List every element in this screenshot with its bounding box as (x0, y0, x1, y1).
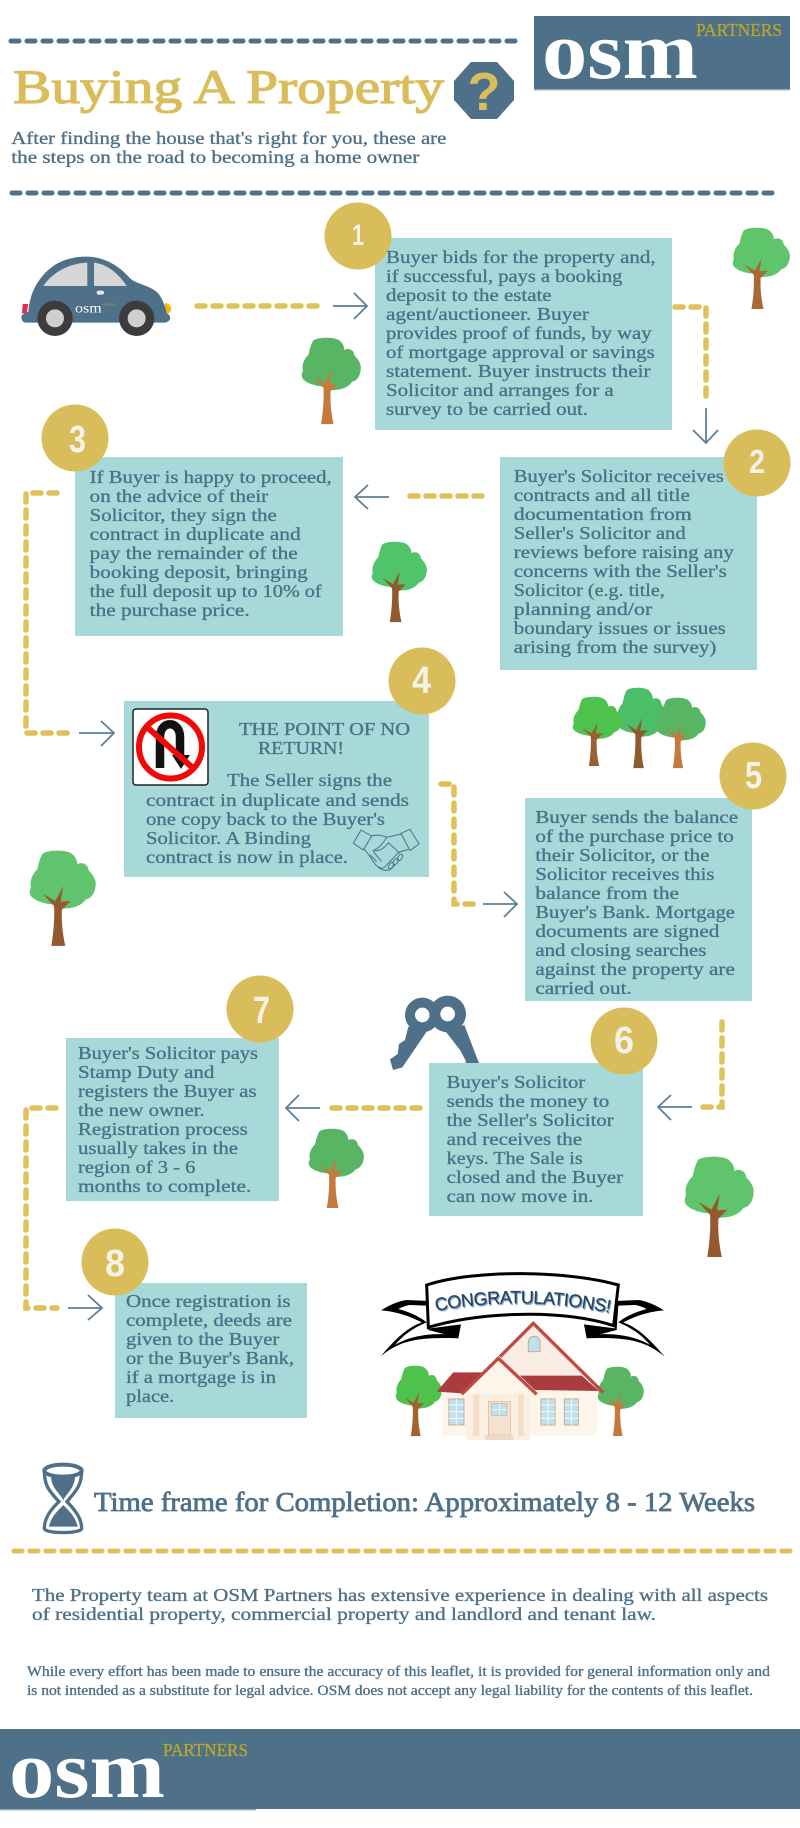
step number 6 (590, 1008, 658, 1074)
step number 4 (388, 648, 456, 714)
icon: car: osm (75, 302, 102, 317)
panel: step 1: if successful, pays a booking (386, 266, 622, 286)
panel: step 7: Registration process (78, 1119, 248, 1139)
disclaimer (27, 1664, 771, 1699)
panel: step 1: provides proof of funds, by way (386, 323, 652, 343)
panel: step 5: Buyer sends the balance (535, 807, 738, 827)
panel: step 3 (42, 404, 343, 636)
arrow: car to step 1 (197, 293, 367, 319)
arrow: step 3 to step 4 (26, 493, 114, 746)
panel: step 8: complete, deeds are (126, 1310, 292, 1330)
panel: step 2: Seller's Solicitor and (514, 523, 686, 543)
step 4 text: The Seller signs the (227, 770, 392, 790)
panel: step 8: given to the Buyer (126, 1329, 279, 1349)
panel: step 2: arising from the survey) (514, 637, 716, 658)
arrow: step 5 to step 6 (658, 1022, 722, 1120)
arrow: step 2 to step 3 (355, 485, 482, 509)
about paragraph: of residential property, commercial property and landlord and tenant law. (32, 1604, 656, 1624)
logo top: PARTNERS (696, 20, 782, 40)
panel: step 5: documents are signed (535, 921, 719, 941)
arrow: step 1 to step 2 (675, 307, 718, 443)
step number 7: 7 (253, 990, 270, 1032)
panel: step 7: months to complete. (78, 1176, 251, 1196)
panel: step 8: Once registration is (126, 1291, 291, 1311)
panel: step 2: concerns with the Seller's (514, 561, 727, 581)
panel: step 1: agent/auctioneer. Buyer (386, 304, 589, 324)
panel: step 8: place. (126, 1386, 174, 1406)
footer band: PARTNERS (163, 1740, 248, 1760)
panel: step 5: and closing searches (535, 940, 706, 960)
panel: step 7: region of 3 - 6 (78, 1157, 195, 1177)
panel: step 1: deposit to the estate (386, 285, 552, 305)
step number 6: 6 (614, 1020, 634, 1062)
panel: step 1 (324, 202, 672, 430)
panel: step 3: If Buyer is happy to proceed, (90, 467, 332, 487)
illustration: congratulations banner (380, 1272, 664, 1396)
icon: question mark octagon (454, 62, 514, 122)
step 4 text (146, 770, 409, 867)
panel: step 6: the Seller's Solicitor (447, 1110, 614, 1130)
step 4 text: contract in duplicate and sends (146, 790, 409, 810)
tree (309, 1129, 364, 1208)
footer band: osm (9, 1724, 165, 1815)
panel: step 5: of the purchase price to (535, 826, 734, 846)
panel: step 3: Solicitor, they sign the (90, 505, 277, 525)
step number 8 (82, 1228, 148, 1296)
icon: handshake (353, 829, 419, 870)
panel: step 7: Buyer's Solicitor pays (78, 1043, 258, 1063)
arrow: step 6 to step 7 (286, 1095, 420, 1121)
step number 2: 2 (749, 443, 765, 480)
panel: step 2: Solicitor (e.g. title, (514, 580, 665, 601)
step number 1 (324, 202, 392, 270)
panel: step 5: against the property are (535, 959, 735, 979)
illustration: congratulations banner: CONGRATULATIONS! (436, 1290, 611, 1312)
step number 2 (724, 430, 790, 496)
panel: step 1: Solicitor and arranges for a (386, 380, 614, 400)
panel: step 8: or the Buyer's Bank, (126, 1348, 294, 1368)
panel: step 3: booking deposit, bringing (90, 562, 308, 582)
panel: step 3: the full deposit up to 10% of (90, 581, 322, 601)
tree (685, 1157, 754, 1257)
panel: step 5 (525, 742, 786, 1001)
panel: step 5: carried out. (535, 978, 632, 998)
heading: the point of no return: THE POINT OF NO (239, 719, 410, 739)
panel: step 3: pay the remainder of the (90, 543, 298, 563)
title: Buying A Property (13, 61, 444, 114)
panel: step 1: Buyer bids for the property and, (386, 247, 656, 267)
panel: step 6: sends the money to (447, 1091, 609, 1111)
time frame heading: Time frame for Completion: Approximately 8 - 12 Weeks (94, 1487, 755, 1517)
panel: step 3: the purchase price. (90, 600, 250, 620)
tree (302, 338, 361, 424)
trees group (573, 688, 706, 768)
panel: step 7: registers the Buyer as (78, 1081, 256, 1101)
panel: step 5: their Solicitor, or the (535, 845, 709, 865)
step number 4: 4 (412, 660, 431, 702)
tree (30, 851, 96, 946)
step 4 text: one copy back to the Buyer's (146, 809, 385, 829)
panel: step 2: boundary issues or issues (514, 618, 726, 638)
panel: step 1: of mortgage approval or savings (386, 342, 655, 362)
subtitle: the steps on the road to becoming a home owner (11, 147, 419, 167)
step number 7 (226, 976, 294, 1042)
icon: car (21, 257, 171, 336)
tree (396, 1366, 442, 1436)
disclaimer: While every effort has been made to ensure the accuracy of this leaflet, it is provided for general information only and (27, 1664, 771, 1680)
heading: the point of no return: RETURN! (258, 738, 344, 758)
tree (733, 228, 790, 309)
step number 5: 5 (745, 755, 762, 797)
step number 8: 8 (105, 1243, 125, 1285)
panel: step 7: Stamp Duty and (78, 1062, 214, 1082)
panel: step 1: statement. Buyer instructs their (386, 361, 651, 381)
subtitle (11, 128, 446, 167)
icon: car: PARTNERS (102, 302, 116, 306)
arrow: step 7 to step 8 (26, 1108, 102, 1320)
tree (372, 542, 427, 622)
step number 5 (720, 742, 786, 810)
about paragraph (32, 1585, 768, 1624)
panel: step 7: the new owner. (78, 1100, 205, 1120)
illustration: congratulations banner: CONGRATULATIONS! (437, 1292, 612, 1314)
panel: step 5: balance from the (535, 883, 679, 903)
panel: step 1: survey to be carried out. (386, 399, 588, 419)
panel: step 6: closed and the Buyer (447, 1167, 623, 1187)
panel: step 6: can now move in. (447, 1186, 593, 1206)
panel: step 7 (66, 976, 294, 1201)
panel: step 7: usually takes in the (78, 1138, 238, 1158)
icon: no u-turn sign (133, 709, 208, 785)
panel: step 8: if a mortgage is in (126, 1367, 276, 1387)
panel: step 4 (124, 648, 456, 877)
icon: question mark octagon: ? (468, 62, 500, 122)
step number 1: 1 (352, 219, 364, 252)
step 4 text: Solicitor. A Binding (146, 828, 311, 848)
step number 3: 3 (69, 419, 86, 461)
logo top (534, 5, 790, 96)
panel: step 2 (500, 430, 790, 670)
panel: step 6: Buyer's Solicitor (447, 1072, 585, 1092)
panel: step 6: keys. The Sale is (447, 1148, 583, 1168)
panel: step 6: and receives the (447, 1129, 582, 1149)
panel: step 2: reviews before raising any (514, 542, 734, 562)
panel: step 6 (429, 1008, 658, 1216)
footer band (0, 1724, 800, 1815)
step number 3 (42, 404, 108, 472)
logo top: osm (542, 5, 698, 96)
step 4 text: contract is now in place. (146, 847, 348, 867)
heading: the point of no return (239, 719, 410, 758)
panel: step 2: contracts and all title (514, 485, 690, 505)
illustration: house (437, 1323, 603, 1440)
panel: step 3: contract in duplicate and (90, 524, 301, 544)
panel: step 8 (82, 1228, 307, 1418)
panel: step 3: on the advice of their (90, 486, 268, 506)
arrow: step 4 to step 5 (441, 784, 517, 917)
icon: keys (390, 996, 481, 1073)
subtitle: After finding the house that's right for you, these are (11, 128, 446, 148)
about paragraph: The Property team at OSM Partners has extensive experience in dealing with all aspects (32, 1585, 768, 1605)
panel: step 5: Buyer's Bank. Mortgage (535, 902, 735, 922)
panel: step 5: Solicitor receives this (535, 864, 714, 884)
panel: step 2: planning and/or (514, 599, 652, 619)
icon: hourglass (44, 1465, 82, 1533)
disclaimer: is not intended as a substitute for legal advice. OSM does not accept any legal liability for the contents of this leaflet. (27, 1683, 753, 1699)
tree (598, 1367, 644, 1436)
panel: step 2: Buyer's Solicitor receives (514, 466, 724, 486)
panel: step 2: documentation from (514, 504, 692, 524)
